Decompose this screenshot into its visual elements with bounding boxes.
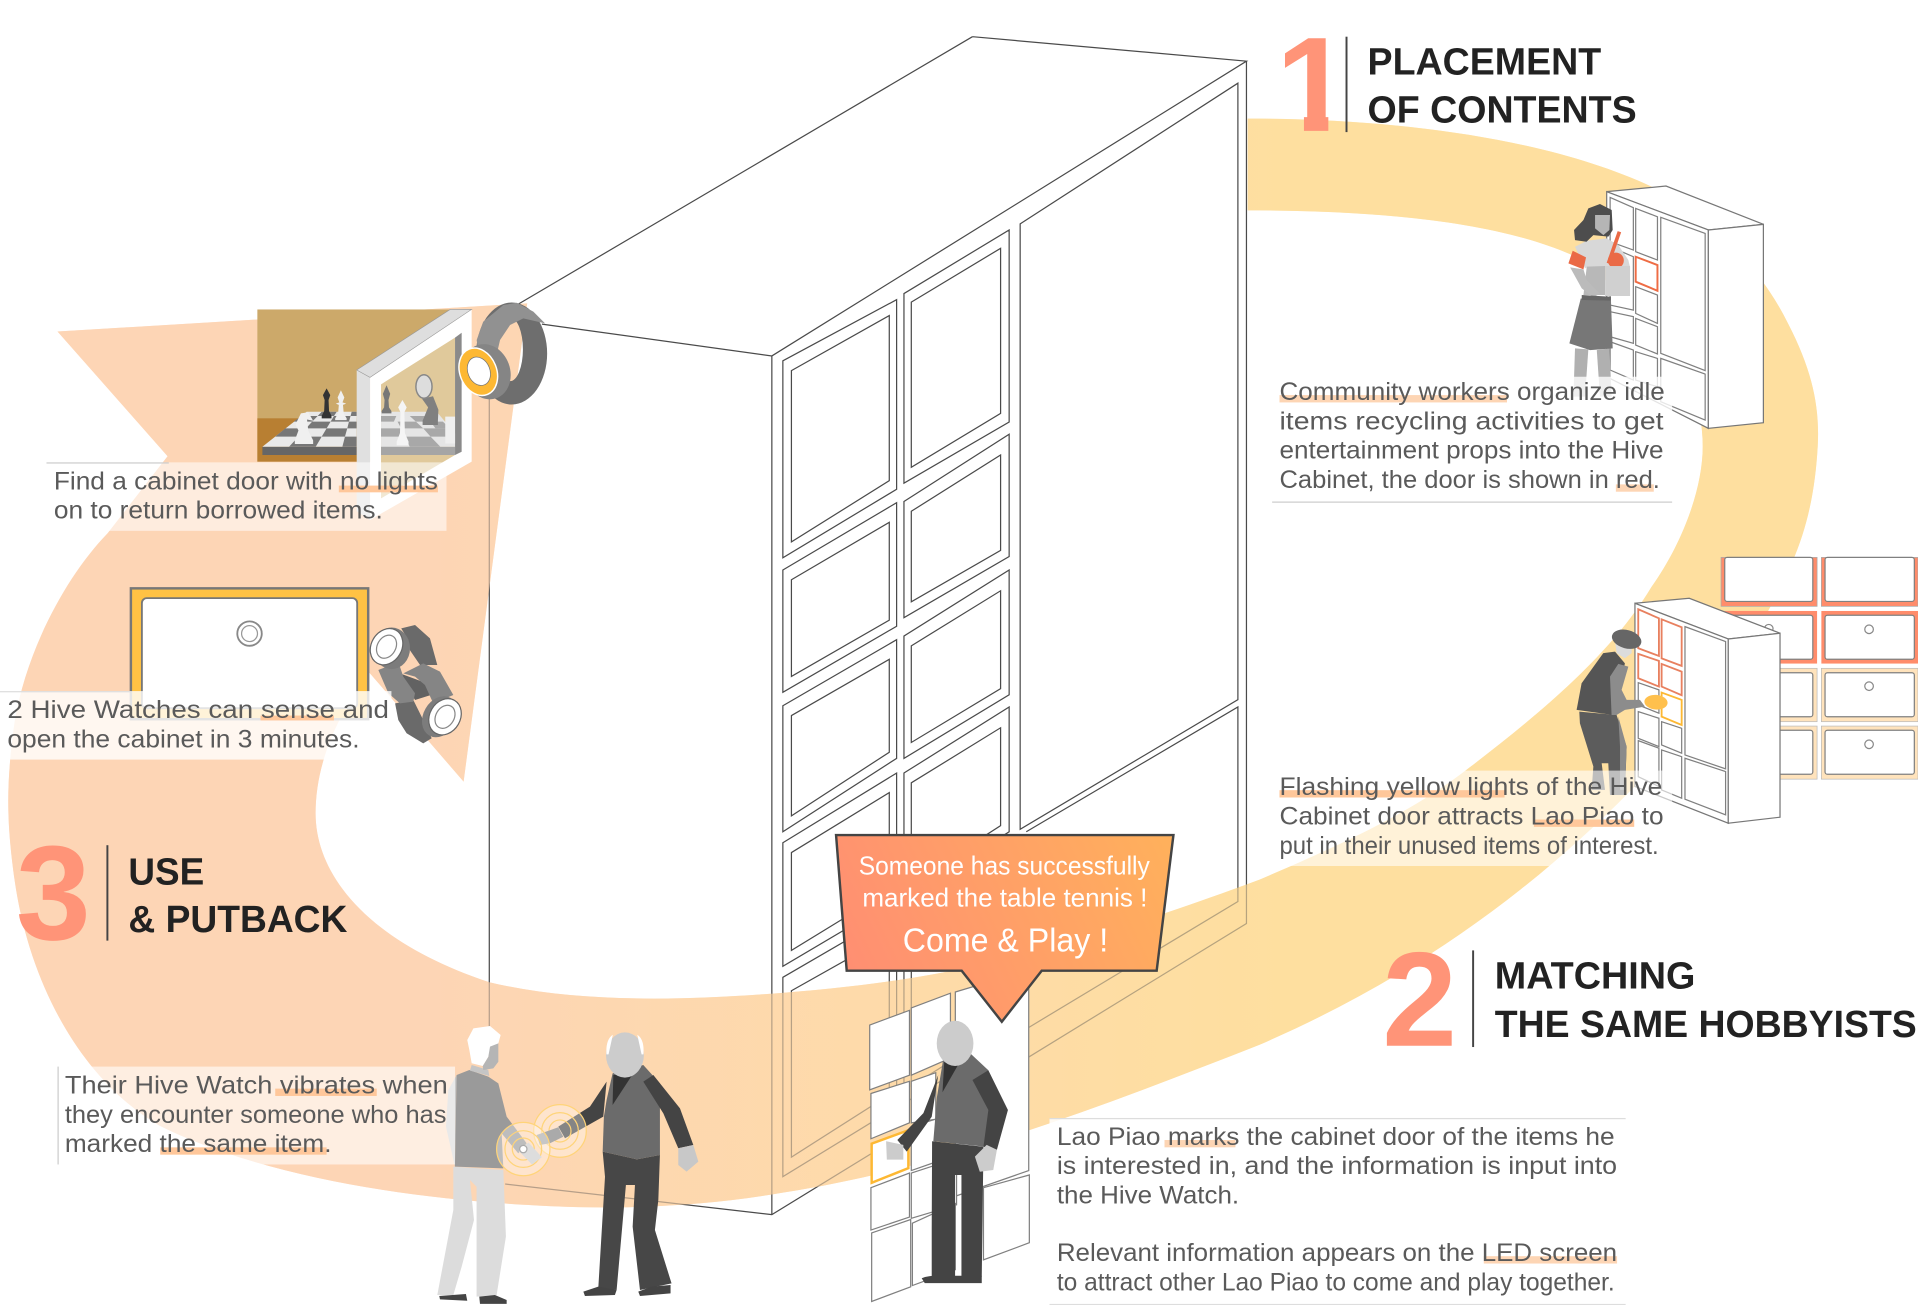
heading 3: use and putback: USE: [128, 851, 204, 893]
callout bubble: Come & Play !: [903, 922, 1108, 959]
text block: flashing yellow lights: [1272, 771, 1672, 866]
heading 2: matching the same hobbyists: [1382, 924, 1917, 1075]
small cabinet: [1635, 598, 1780, 823]
cabinet doors, left column: [783, 300, 897, 1177]
text block: two Hive Watches: 2 Hive Watches can sense and: [7, 696, 389, 724]
text block: flashing yellow lights: put in their unused items of interest.: [1279, 832, 1659, 860]
figure: two people shaking hands with vibrating watches: [437, 1026, 698, 1304]
heading 2: matching the same hobbyists: THE SAME HOBBYISTS: [1495, 1004, 1917, 1046]
flow band: arrow looping through the three steps: [8, 119, 1818, 1207]
yellow door: [1662, 693, 1682, 725]
red door: [1636, 257, 1657, 291]
text block: community workers: items recycling activities to get: [1279, 407, 1664, 435]
heading 3: use and putback: 3: [16, 817, 91, 968]
chess pieces: [295, 388, 347, 444]
text block: community workers: Community workers organize idle: [1279, 378, 1665, 406]
callout bubble: [836, 835, 1173, 1022]
text block: find a cabinet door: on to return borrowed items.: [54, 497, 383, 525]
small cabinet with Lao Piao: [1577, 598, 1780, 823]
text block: Lao Piao marks the door: to attract other Lao Piao to come and play together.: [1057, 1268, 1615, 1296]
vibration rings: [497, 1105, 586, 1176]
text block: flashing yellow lights: Flashing yellow lights of the Hive: [1279, 773, 1662, 801]
text block: Lao Piao marks the door: Relevant information appears on the LED screen: [1057, 1239, 1617, 1267]
text block: community workers: [1272, 377, 1672, 503]
heading 2: matching the same hobbyists: MATCHING: [1495, 955, 1695, 997]
heading 1: placement of contents: 1: [1276, 9, 1351, 160]
heading 2: matching the same hobbyists: 2: [1382, 924, 1457, 1075]
cabinet doors, tall right column: [1020, 83, 1238, 1027]
text block: Hive Watch vibrates: they encounter someone who has: [65, 1101, 446, 1129]
heading 1: placement of contents: PLACEMENT: [1368, 42, 1601, 84]
figure: Lao Piao reaching for the door: [1577, 626, 1668, 795]
text block: find a cabinet door: [46, 462, 446, 531]
text block: Lao Piao marks the door: [1050, 1118, 1626, 1305]
callout bubble: Someone has successfully: [859, 851, 1151, 881]
text block: two Hive Watches: [0, 691, 391, 760]
heading 3: use and putback: & PUTBACK: [128, 899, 348, 941]
icon: two linked Hive Watches: [364, 623, 468, 744]
chess illustration behind an open cabinet door: [257, 309, 451, 462]
text block: Lao Piao marks the door: is interested in, and the information is input into: [1057, 1152, 1617, 1180]
drawer panel: red and pale lit doors: [1721, 557, 1918, 779]
icon: Hive Watch with yellow ring: [452, 302, 547, 406]
heading 3: use and putback: [16, 817, 348, 968]
text block: Hive Watch vibrates: [57, 1067, 455, 1164]
LED cabinet doors with marked yellow door: [870, 970, 1029, 1301]
text block: Hive Watch vibrates: Their Hive Watch vibrates when: [65, 1072, 448, 1100]
cabinet doors, middle column: [904, 230, 1009, 1103]
text block: Hive Watch vibrates: marked the same item.: [65, 1130, 331, 1158]
small cabinet: [1607, 186, 1763, 428]
heading 1: placement of contents: [1285, 36, 1636, 132]
chess board: [262, 412, 357, 455]
callout bubble: marked the table tennis !: [862, 882, 1147, 912]
text block: two Hive Watches: open the cabinet in 3 minutes.: [7, 725, 360, 753]
red doors: [1638, 609, 1682, 695]
text block: Lao Piao marks the door: Lao Piao marks the cabinet door of the items he: [1057, 1123, 1615, 1151]
person in light trousers: [437, 1026, 527, 1304]
text block: find a cabinet door: Find a cabinet door with no lights: [54, 467, 438, 495]
text block: community workers: Cabinet, the door is shown in red.: [1279, 466, 1660, 494]
text block: community workers: entertainment props into the Hive: [1279, 437, 1664, 465]
large Hive Cabinet, line drawing: [489, 37, 1246, 1215]
person in dark trousers: [558, 1032, 698, 1296]
figure: community worker: [1568, 204, 1630, 397]
small cabinet with community worker: [1568, 186, 1763, 428]
text block: flashing yellow lights: Cabinet door attracts Lao Piao to: [1279, 802, 1664, 830]
open cabinet door frame: [357, 309, 472, 520]
yellow lit cabinet door: [131, 588, 368, 719]
heading 1: placement of contents: OF CONTENTS: [1368, 89, 1637, 131]
text block: Lao Piao marks the door: the Hive Watch.: [1057, 1182, 1239, 1210]
figure: Lao Piao marking the door: [886, 1021, 1008, 1283]
